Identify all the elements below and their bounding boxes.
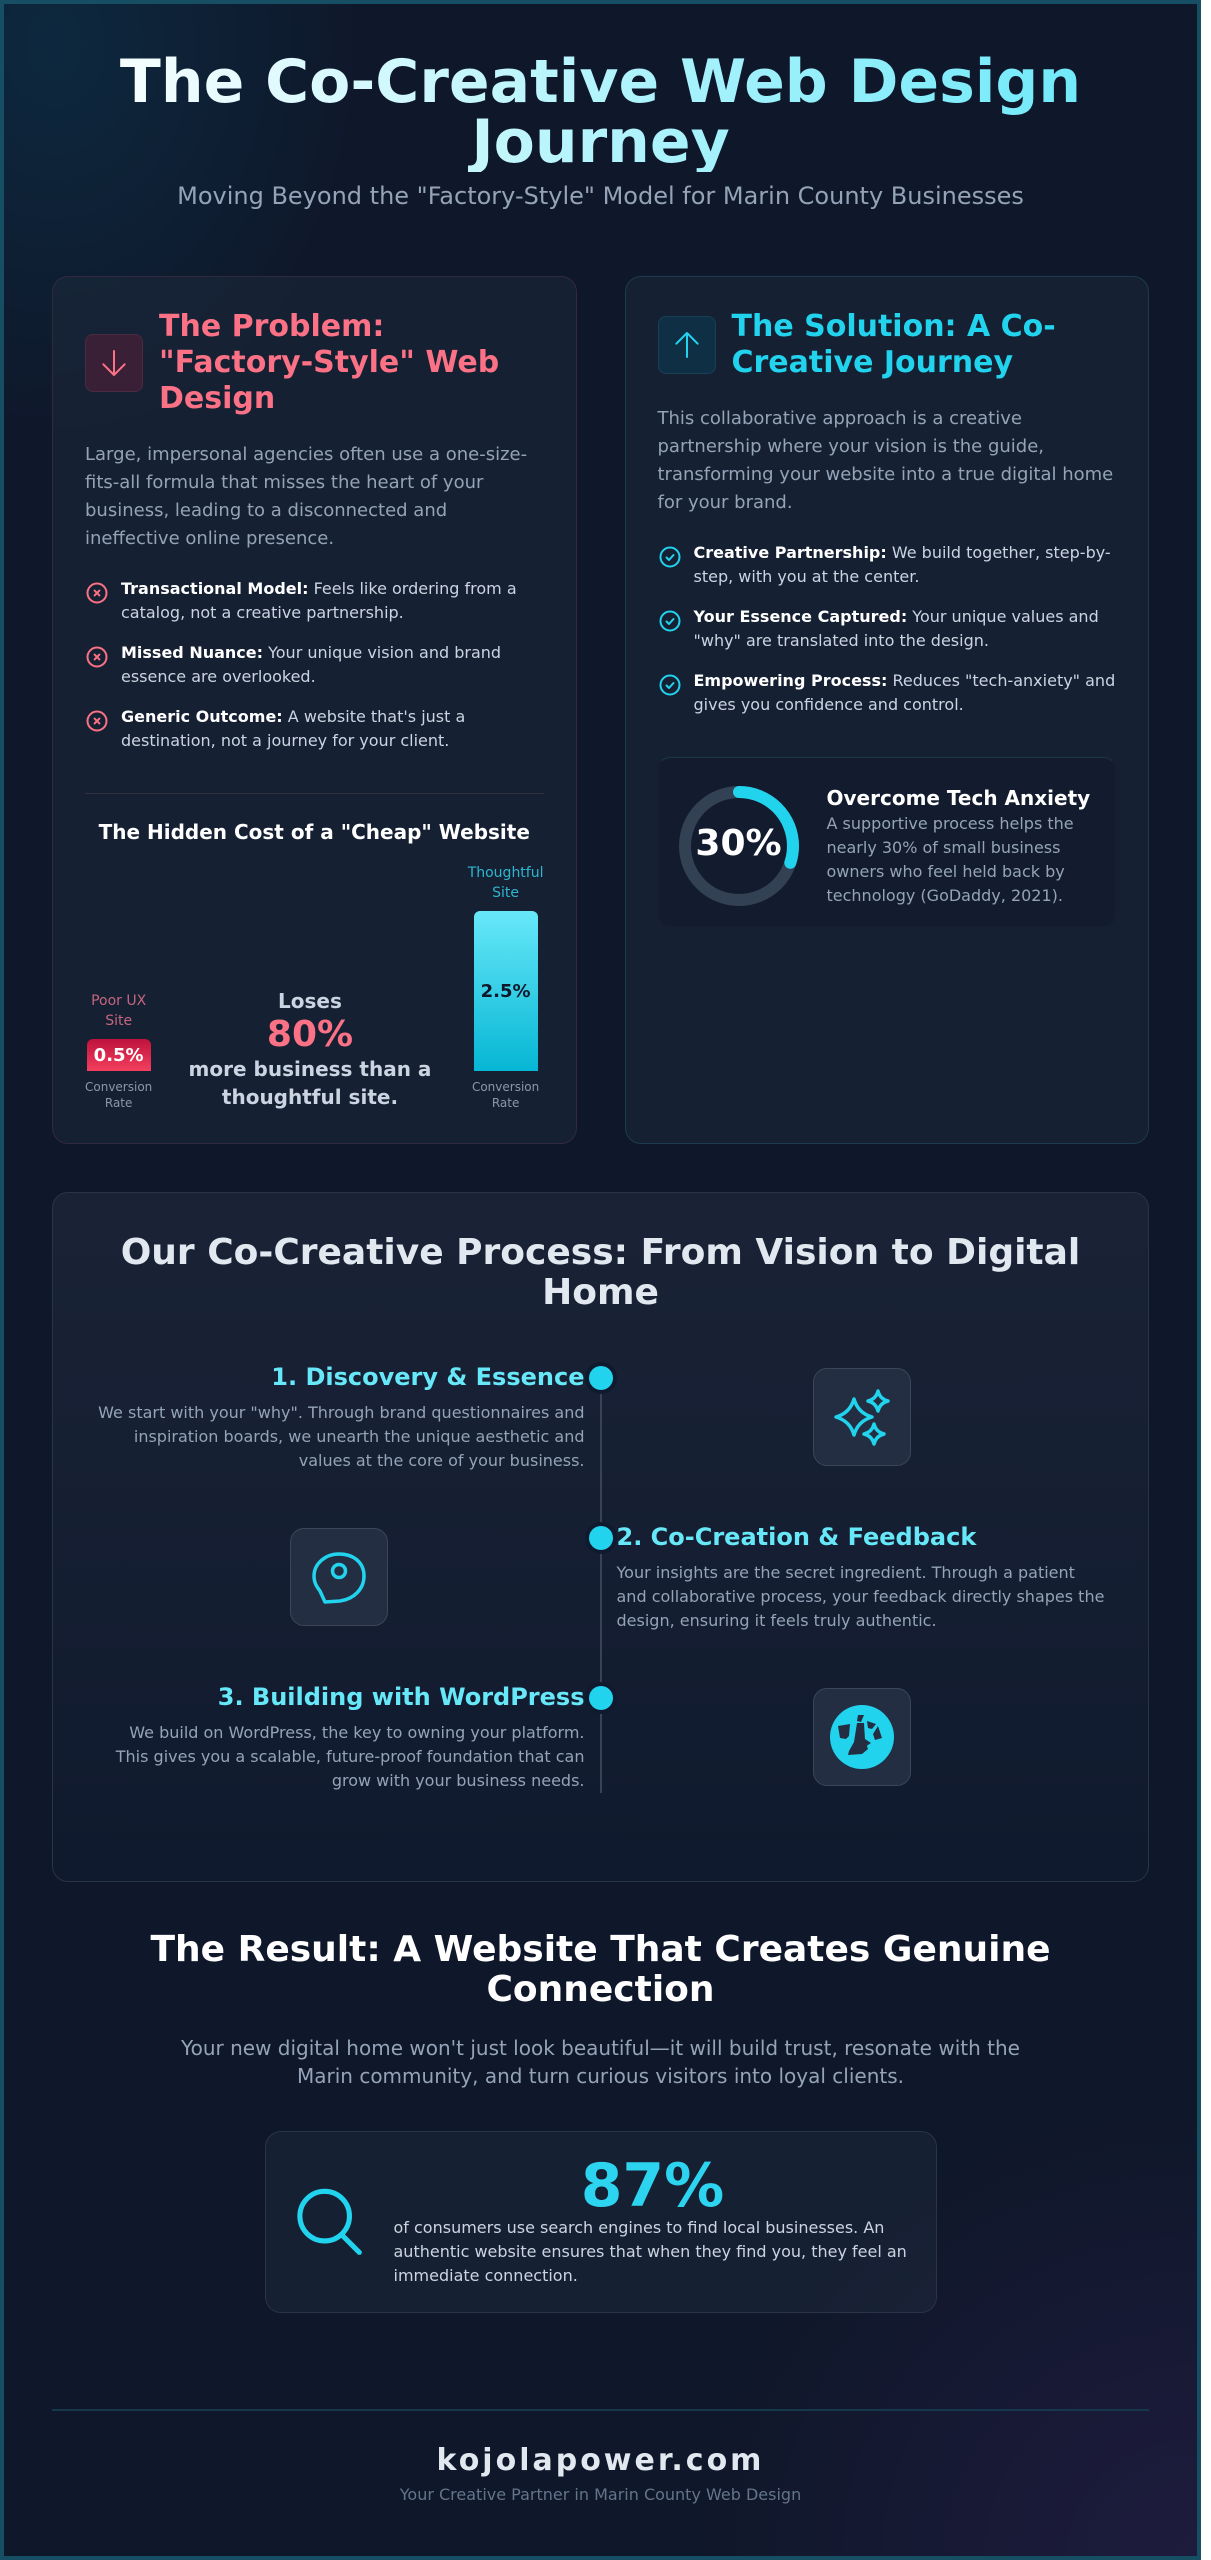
donut chart: 30%: [679, 786, 799, 906]
bar: poor UX site: 0.5%: [94, 1044, 144, 1066]
step 1: [98, 1362, 911, 1470]
stat card: 87%: [264, 2131, 936, 2313]
two column section: [52, 276, 1149, 1144]
result heading: The Result: A Website That Creates Genuine Connection: [150, 1929, 1051, 2010]
step 2 text: Your insights are the secret ingredient. Through a patient and collaborative process, your feedback directly shapes the design, ensuring it feels truly authentic.: [616, 1563, 1104, 1630]
donut chart: 30%: 30%: [695, 823, 782, 864]
step 1 text: [98, 1363, 584, 1470]
bar: poor UX site: Site: [105, 1013, 132, 1029]
callout: loses 80%: thoughtful site.: [222, 1085, 398, 1109]
panel: the solution: [624, 276, 1149, 1144]
chart: hidden cost: The Hidden Cost of a "Cheap" Website: [99, 820, 530, 844]
bar: thoughtful site: Rate: [492, 1096, 519, 1110]
step 3 text: 3. Building with WordPress: [218, 1683, 584, 1711]
bar: poor UX site: Poor UX: [91, 993, 146, 1009]
panel: process: [52, 1192, 1149, 1882]
result text: [181, 2036, 1020, 2088]
bar: thoughtful site: Site: [492, 885, 519, 901]
chart: hidden cost: [85, 793, 544, 1111]
icon: speech pin: [290, 1528, 388, 1626]
list item: essence captured: Your Essence Captured: Your unique values and "why" are translated into the design.: [694, 607, 1099, 650]
stat text: of consumers use search engines to find local businesses. An authentic website ensures that when they find you, they feel an immediate connection.: [394, 2218, 907, 2285]
step 2: [290, 1522, 1104, 1630]
footer tagline: Your Creative Partner in Marin County Web Design: [400, 2485, 801, 2504]
list item: generic outcome: Generic Outcome: A website that's just a destination, not a journey for your client.: [121, 707, 465, 750]
bar: poor UX site: Conversion: [85, 1080, 152, 1094]
bar: thoughtful site: Conversion: [472, 1080, 539, 1094]
solution list: [660, 543, 1115, 714]
icon: down arrow: [85, 334, 143, 392]
stat text: 87%: [581, 2151, 724, 2221]
result text: Your new digital home won't just look beautiful—it will build trust, resonate with the: [181, 2036, 1020, 2060]
subtitle: Moving Beyond the "Factory-Style" Model for Marin County Businesses: [177, 182, 1024, 210]
bar: thoughtful site: [468, 865, 544, 1110]
list item: empowering process: Empowering Process: Reduces "tech-anxiety" and gives you confidence and control.: [694, 671, 1115, 714]
icon: sparkles: [813, 1368, 911, 1466]
step 1 text: 1. Discovery & Essence: [271, 1363, 584, 1391]
stat text: Overcome Tech Anxiety: [826, 786, 1090, 810]
solution heading: The Solution: A Co-Creative Journey: [732, 309, 1056, 380]
step 3 text: We build on WordPress, the key to owning your platform. This gives you a scalable, future-proof foundation that can grow with your business needs.: [116, 1723, 584, 1790]
icon: wordpress globe: [813, 1688, 911, 1786]
title: The Co-Creative Web Design Journey: [120, 47, 1081, 177]
icon: search: [297, 2188, 362, 2255]
bar comparison: [85, 865, 544, 1110]
result text: Marin community, and turn curious visitors into loyal clients.: [297, 2064, 904, 2088]
bar: thoughtful site: 2.5%: [481, 980, 531, 1002]
problem description: Large, impersonal agencies often use a one-size-fits-all formula that misses the heart of your business, leading to a disconnected and ineffective online presence.: [85, 444, 527, 549]
step 1 text: We start with your "why". Through brand questionnaires and inspiration boards, we unearth the unique aesthetic and values at the core of your business.: [98, 1403, 584, 1470]
callout: loses 80%: Loses more business than a: [189, 989, 431, 1081]
panel: the problem: [52, 276, 576, 1144]
footer: [52, 2409, 1149, 2507]
timeline: [98, 1362, 1104, 1793]
stat text: A supportive process helps the nearly 30% of small business owners who feel held back by technology (GoDaddy, 2021).: [826, 814, 1074, 905]
solution description: This collaborative approach is a creative partnership where your vision is the guide, transforming your website into a true digital home for your brand.: [658, 408, 1113, 513]
step 3: [116, 1682, 911, 1790]
step 2 text: 2. Co-Creation & Feedback: [616, 1523, 976, 1551]
result section: [150, 1929, 1051, 2313]
problem list: [86, 579, 517, 750]
stat text: [394, 2151, 907, 2285]
problem heading: The Problem: "Factory-Style" Web Design: [159, 309, 499, 416]
step 2 text: [616, 1523, 1104, 1630]
footer domain: kojolapower.com: [437, 2443, 764, 2478]
icon: up arrow: [658, 316, 716, 374]
list item: creative partnership: Creative Partnership: We build together, step-by-step, with you at the center.: [694, 543, 1111, 586]
step 3 text: [116, 1683, 584, 1790]
list item: transactional model: Transactional Model: Feels like ordering from a catalog, not a creative partnership.: [121, 579, 517, 622]
bar: poor UX site: [85, 993, 152, 1110]
list item: missed nuance: Missed Nuance: Your unique vision and brand essence are overlooked.: [121, 643, 501, 686]
callout: loses 80%: 80%: [267, 1014, 353, 1055]
process heading: Our Co-Creative Process: From Vision to Digital Home: [121, 1232, 1080, 1313]
bar: thoughtful site: Thoughtful: [468, 865, 544, 881]
stat box: overcome tech anxiety: [658, 757, 1116, 927]
bar: poor UX site: Rate: [105, 1096, 132, 1110]
